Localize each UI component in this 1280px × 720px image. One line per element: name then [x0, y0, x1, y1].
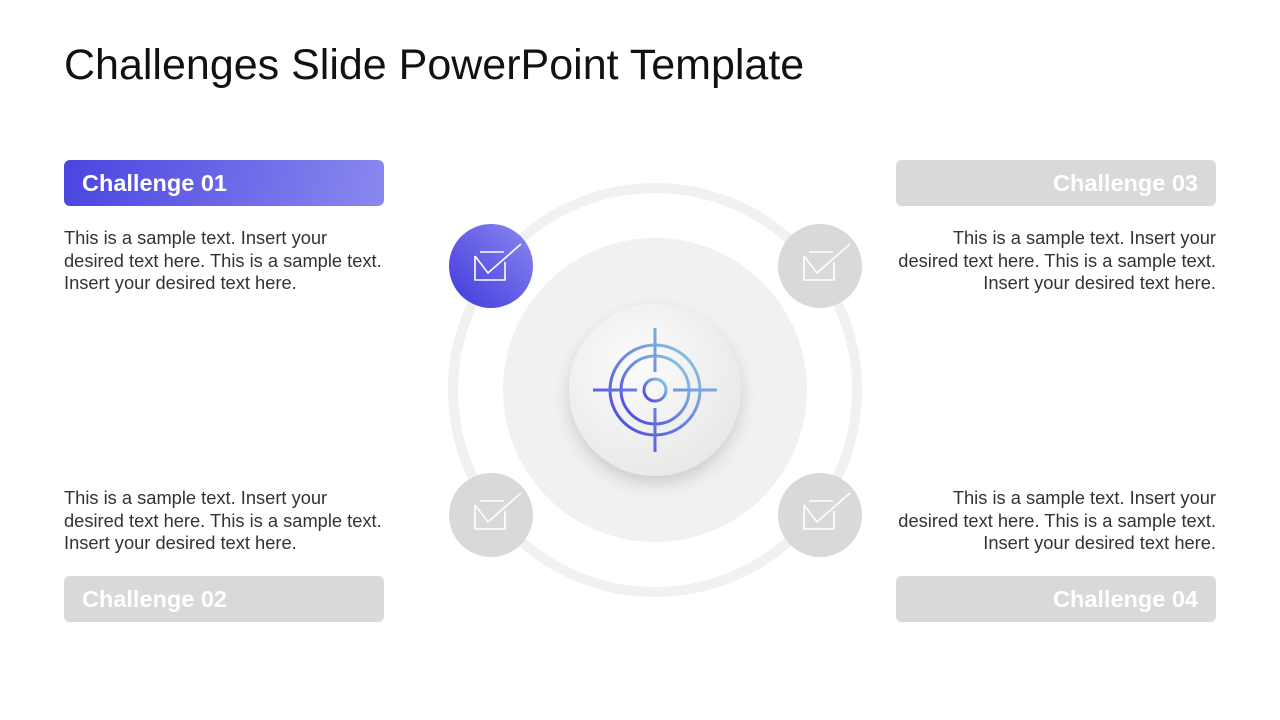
label: challenge 03: [896, 160, 1216, 206]
icon circle 1 (active): [449, 224, 533, 308]
text: challenge 01: This is a sample text. Insert your: [64, 227, 327, 248]
text: challenge 03: [898, 227, 1216, 293]
inner disc: [503, 238, 807, 542]
icon circle 3: [778, 224, 862, 308]
label: challenge 02: Challenge 02: [82, 586, 227, 612]
title: Challenges Slide PowerPoint Template: [64, 41, 804, 89]
icon circle 4: [778, 473, 862, 557]
text: challenge 04: Insert your desired text here.: [983, 532, 1216, 553]
text: challenge 02: [64, 487, 382, 553]
text: challenge 02: Insert your desired text here.: [64, 532, 297, 553]
label: challenge 02: [64, 576, 384, 622]
label: challenge 04: Challenge 04: [1053, 586, 1198, 612]
text: challenge 03: desired text here. This is a sample text.: [898, 250, 1216, 270]
label: challenge 04: [896, 576, 1216, 622]
text: challenge 04: This is a sample text. Insert your: [953, 487, 1216, 508]
outer ring: [453, 188, 857, 592]
label: challenge 03: Challenge 03: [1053, 170, 1198, 196]
text: challenge 04: desired text here. This is a sample text.: [898, 510, 1216, 530]
center ball with target icon: [569, 304, 741, 476]
text: challenge 02: This is a sample text. Insert your: [64, 487, 327, 508]
icon circle 2: [449, 473, 533, 557]
text: challenge 02: desired text here. This is a sample text.: [64, 510, 382, 530]
text: challenge 01: desired text here. This is a sample text.: [64, 250, 382, 270]
text: challenge 03: Insert your desired text here.: [983, 272, 1216, 293]
text: challenge 03: This is a sample text. Insert your: [953, 227, 1216, 248]
label: challenge 01: [64, 160, 384, 206]
text: challenge 01: Insert your desired text here.: [64, 272, 297, 293]
label: challenge 01: Challenge 01: [82, 170, 227, 196]
text: challenge 04: [898, 487, 1216, 553]
text: challenge 01: [64, 227, 382, 293]
